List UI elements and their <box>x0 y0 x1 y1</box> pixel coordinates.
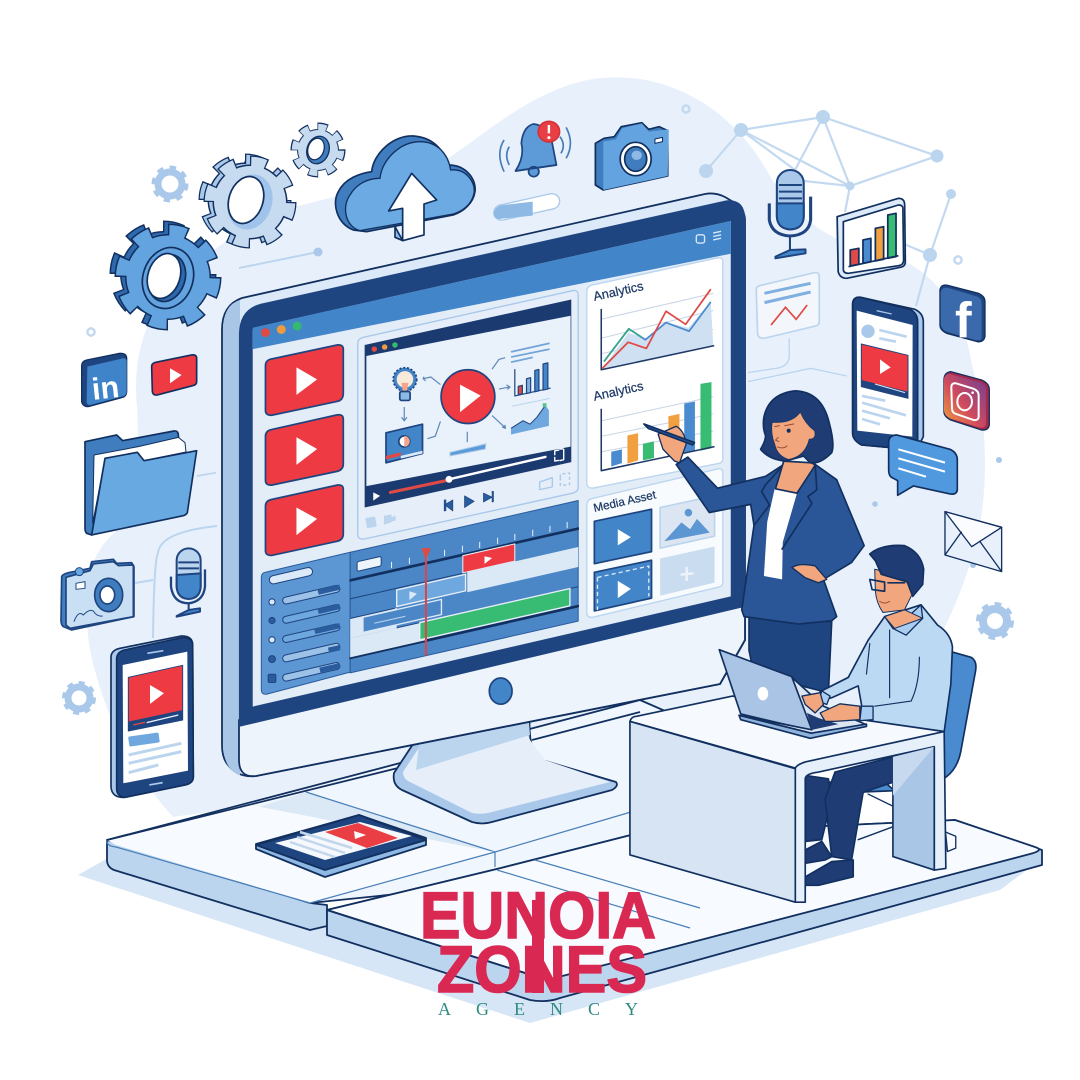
heading: media asset: Media Asset <box>592 488 658 515</box>
line chart <box>601 289 714 370</box>
icon: phone right <box>853 297 923 450</box>
man torso <box>818 605 952 732</box>
desk and people <box>630 391 976 902</box>
video player canvas <box>366 316 571 486</box>
icon: tablet <box>256 815 426 877</box>
bar chart <box>601 382 715 471</box>
woman hand on hip <box>792 565 827 583</box>
logo: Zones: ZONES <box>437 932 647 1006</box>
small arrows <box>401 358 510 442</box>
icon: linkedin <box>82 353 127 407</box>
icon: gear small <box>295 127 341 173</box>
icon: chart card <box>837 198 905 278</box>
platform front slab top <box>327 820 1039 980</box>
timeline tracks <box>350 501 578 673</box>
icon: flat gears <box>65 169 1011 712</box>
laptop <box>719 650 866 738</box>
window dots <box>261 322 302 337</box>
progress bar <box>492 192 561 222</box>
icon: camera left <box>61 559 134 630</box>
mini bar chart <box>515 363 551 396</box>
woman skirt <box>749 617 832 693</box>
heading: analytics 2: Analytics <box>592 378 645 404</box>
icon: cloud upload <box>335 136 475 241</box>
power button <box>489 678 512 704</box>
background blob <box>86 77 985 817</box>
icon: camera top <box>595 123 669 190</box>
timeline sidebar <box>261 552 350 694</box>
player progress <box>390 457 545 492</box>
logo: stem linking N letters <box>532 900 544 993</box>
icon: phone left <box>111 636 193 797</box>
analytics panel <box>587 258 723 488</box>
mini text lines <box>511 343 550 362</box>
central play button <box>441 370 495 424</box>
screen <box>253 221 731 707</box>
icon: instagram <box>944 372 989 430</box>
player dots <box>372 342 398 352</box>
fullscreen icon <box>555 449 564 461</box>
small panel icons <box>365 514 396 528</box>
icon: microphone top <box>769 170 811 258</box>
window controls <box>696 231 721 243</box>
platform back slab <box>107 700 800 903</box>
transport controls <box>444 491 493 511</box>
clips <box>463 544 515 573</box>
monitor chin <box>239 600 745 776</box>
icon: facebook: f <box>955 293 972 349</box>
mini video card <box>386 424 423 463</box>
monitor dark bezel <box>239 200 745 727</box>
icon: facebook <box>940 285 985 349</box>
icon: gear medium <box>205 160 290 242</box>
media thumbnails <box>594 496 715 611</box>
platform floor shadow <box>150 792 495 852</box>
video panel <box>358 290 578 539</box>
playhead <box>421 548 431 656</box>
icon: notification bell <box>500 121 570 177</box>
icon: linkedin: in <box>90 370 121 407</box>
platform <box>107 700 1042 1001</box>
icon: youtube small <box>152 355 197 395</box>
desk <box>630 696 946 902</box>
woman jacket <box>676 457 864 624</box>
man legs <box>805 757 893 885</box>
platform left slab <box>107 840 327 930</box>
media asset panel <box>587 469 723 617</box>
logo: Eunoia: EUNOIA <box>420 878 656 952</box>
man head <box>870 545 924 628</box>
monitor back rim <box>222 193 745 776</box>
monitor stand <box>394 712 617 824</box>
video player frame <box>365 300 571 508</box>
monitor <box>222 193 745 776</box>
icon: envelope <box>945 512 1002 572</box>
platform left slab top <box>107 805 495 903</box>
heading: analytics: Analytics <box>592 278 645 304</box>
chair <box>822 652 976 852</box>
platform front slab <box>327 820 1042 1001</box>
player play icon <box>373 492 380 501</box>
icon: folder <box>85 431 216 535</box>
window top bar <box>253 221 731 349</box>
icon: gear large <box>117 228 214 323</box>
network diagram <box>87 106 1002 568</box>
platform shadow <box>78 858 1040 1023</box>
man hands <box>802 693 860 721</box>
woman hand with pen <box>644 424 694 463</box>
logo: Eunoia Zones Agency <box>420 878 656 1019</box>
mini area chart <box>511 398 550 435</box>
icon: chat bubble <box>889 435 957 495</box>
mini progress bar <box>450 444 486 456</box>
woman head <box>761 391 833 493</box>
icon: microphone left <box>171 548 205 617</box>
logo: Agency: AGENCY <box>438 999 638 1019</box>
connector line <box>239 248 322 268</box>
connector lines <box>135 526 217 638</box>
icon: mini line card <box>748 273 847 382</box>
ruler ticks <box>392 522 567 568</box>
icon: lightbulb <box>393 368 417 400</box>
red video buttons <box>265 345 343 555</box>
